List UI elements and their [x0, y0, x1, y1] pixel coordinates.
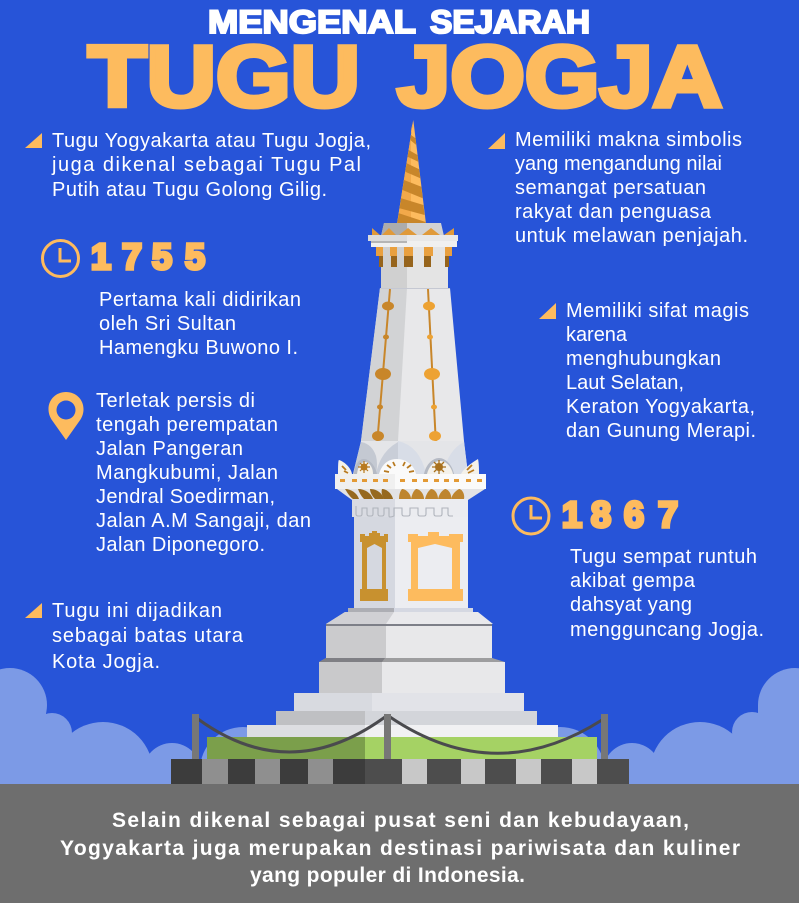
text block: intro [25, 130, 371, 201]
text block: magical nature: karena [566, 324, 628, 346]
heading: tugu jogja [88, 29, 722, 125]
icon: triangle bullet [25, 603, 42, 618]
window right [408, 532, 463, 601]
panel: location: Mangkubumi, Jalan [96, 462, 278, 484]
text block: magical nature: dan Gunung Merapi. [566, 420, 756, 442]
shaft [361, 235, 464, 441]
text block: intro: Tugu Yogyakarta atau Tugu Jogja, [52, 130, 371, 152]
panel: 1755 [42, 236, 301, 359]
footer text: Selain dikenal sebagai pusat seni dan kebudayaan, [112, 809, 689, 832]
footer text: yang populer di Indonesia. [250, 864, 525, 887]
text block: symbolic meaning: rakyat dan penguasa [515, 201, 712, 223]
panel: 1867: akibat gempa [570, 570, 696, 592]
text block: symbolic meaning: yang mengandung nilai [515, 153, 722, 175]
icon: triangle bullet [539, 303, 556, 319]
text block: intro: Putih atau Tugu Golong Gilig. [52, 179, 327, 201]
heading: mengenal sejarah: SEJARAH [430, 4, 590, 40]
text block: northern boundary [25, 600, 244, 673]
checkered curb [171, 759, 629, 784]
panel: 1867: Tugu sempat runtuh [570, 546, 757, 568]
text block: magical nature: Memiliki sifat magis [566, 300, 749, 322]
panel: location: Jendral Soedirman, [96, 486, 275, 508]
text block: northern boundary: sebagai batas utara [52, 625, 244, 647]
panel: location [48, 390, 311, 556]
icon: map pin [48, 392, 84, 440]
panel: location: Terletak persis di [96, 390, 255, 412]
footer panel [0, 784, 799, 903]
heading: mengenal sejarah: MENGENAL [208, 4, 416, 40]
text block: magical nature: Laut Selatan, [566, 372, 684, 394]
icon: clock [513, 498, 549, 534]
panel: location: Jalan Diponegoro. [96, 534, 265, 556]
spire [397, 120, 426, 224]
footer text [60, 809, 740, 887]
title [88, 4, 722, 125]
window left [360, 531, 388, 601]
heading: tugu jogja: TUGU [88, 29, 360, 125]
text block: northern boundary: Tugu ini dijadikan [52, 600, 222, 622]
panel: location: Jalan A.M Sangaji, dan [96, 510, 311, 532]
grass [207, 737, 597, 759]
panel: 1867: mengguncang Jogja. [570, 619, 764, 641]
fence posts and chain [192, 714, 608, 759]
merlons [376, 247, 452, 256]
panel: 1755: Hamengku Buwono I. [99, 337, 298, 359]
text block: symbolic meaning: untuk melawan penjajah. [515, 225, 748, 247]
clouds [0, 668, 799, 822]
year 1755: 1755 [91, 236, 205, 277]
icon: triangle bullet [488, 133, 505, 149]
ornaments [372, 289, 441, 445]
panel: location: Jalan Pangeran [96, 438, 243, 460]
panel: 1755: oleh Sri Sultan [99, 313, 236, 335]
band [335, 474, 486, 500]
text block: symbolic meaning [488, 129, 748, 247]
crown [372, 223, 454, 236]
text block: magical nature: Keraton Yogyakarta, [566, 396, 755, 418]
icon: triangle bullet [25, 133, 42, 148]
text block: symbolic meaning: semangat persatuan [515, 177, 706, 199]
pedestal [352, 499, 468, 608]
footer text: Yogyakarta juga merupakan destinasi pariwisata dan kuliner [60, 837, 740, 860]
heading: tugu jogja: JOGJA [397, 29, 722, 125]
panel: 1867 [513, 494, 764, 641]
text block: symbolic meaning: Memiliki makna simbolis [515, 129, 742, 151]
text block: intro: juga dikenal sebagai Tugu Pal [51, 154, 361, 176]
text block: magical nature: menghubungkan [566, 348, 721, 370]
year 1867: 1867 [562, 494, 678, 535]
text block: northern boundary: Kota Jogja. [52, 651, 160, 673]
text block: magical nature [539, 300, 756, 442]
panel: 1867: dahsyat yang [570, 594, 692, 616]
panel: 1755: Pertama kali didirikan [99, 289, 301, 311]
panel: location: tengah perempatan [96, 414, 278, 436]
monument: Tugu Jogja [171, 120, 629, 784]
stepped base [247, 608, 558, 738]
lotus leaves [338, 441, 479, 474]
icon: clock [42, 240, 78, 276]
heading: mengenal sejarah [208, 4, 590, 40]
